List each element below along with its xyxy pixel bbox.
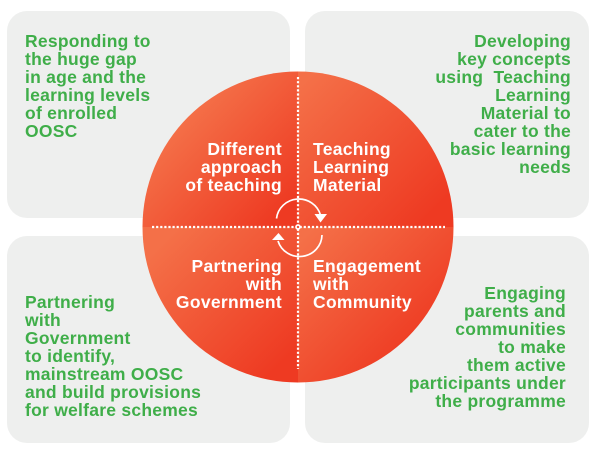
panel: top left xyxy=(7,11,290,218)
label: different approach of teaching: approach xyxy=(201,157,282,177)
text: engaging parents and communities: parents and xyxy=(464,301,566,321)
dotted horizontal axis xyxy=(152,226,445,228)
label: engagement with community: Community xyxy=(313,292,412,312)
text: partnering with government: with xyxy=(24,310,61,330)
text: responding to the gap: Responding to xyxy=(25,31,151,51)
label: teaching learning material: Material xyxy=(313,175,382,195)
text: partnering with government: mainstream OOSC xyxy=(25,364,183,384)
label: partnering with government: with xyxy=(245,274,282,294)
text: responding to the gap: in age and the xyxy=(25,67,146,87)
text: responding to the gap: learning levels xyxy=(25,85,150,105)
text: engaging parents and communities: Engaging xyxy=(484,283,566,303)
text: developing key concepts: Developing xyxy=(474,31,571,51)
text: engaging parents and communities: the programme xyxy=(435,391,566,411)
label: teaching learning material: Learning xyxy=(313,157,389,177)
text: responding to the gap: the huge gap xyxy=(25,49,137,69)
text: developing key concepts: needs xyxy=(519,157,571,177)
text: partnering with government: Partnering xyxy=(25,292,115,312)
text: responding to the gap: OOSC xyxy=(25,121,78,141)
text: developing key concepts: using Teaching xyxy=(435,67,571,87)
panel: top right xyxy=(305,11,589,218)
panel: bottom right xyxy=(305,236,589,443)
text: engaging parents and communities: them active xyxy=(467,355,566,375)
text: partnering with government: Government xyxy=(25,328,131,348)
text: developing key concepts: Material to xyxy=(481,103,571,123)
label: partnering with government: Partnering xyxy=(191,256,282,276)
text: developing key concepts: Learning xyxy=(495,85,571,105)
text: developing key concepts: key concepts xyxy=(457,49,571,69)
label: partnering with government: Government xyxy=(176,292,282,312)
text: engaging parents and communities: to make xyxy=(498,337,566,357)
text: partnering with government: and build provisions xyxy=(25,382,201,402)
text: developing key concepts: basic learning xyxy=(450,139,571,159)
panel: bottom left xyxy=(7,236,290,443)
dotted vertical axis xyxy=(297,77,299,369)
label: engagement with community: with xyxy=(312,274,349,294)
text: partnering with government: to identify, xyxy=(25,346,115,366)
text: developing key concepts: cater to the xyxy=(474,121,571,141)
icon: cycle arrows xyxy=(272,199,327,257)
text: responding to the gap: of enrolled xyxy=(25,103,117,123)
central circle xyxy=(142,72,454,382)
label: teaching learning material: Teaching xyxy=(313,139,391,159)
label: different approach of teaching: Different xyxy=(207,139,282,159)
text: engaging parents and communities: participants under xyxy=(409,373,566,393)
label: engagement with community: Engagement xyxy=(313,256,421,276)
text: engaging parents and communities: communities xyxy=(455,319,566,339)
text: partnering with government: for welfare schemes xyxy=(25,400,198,420)
label: different approach of teaching: of teaching xyxy=(185,175,282,195)
